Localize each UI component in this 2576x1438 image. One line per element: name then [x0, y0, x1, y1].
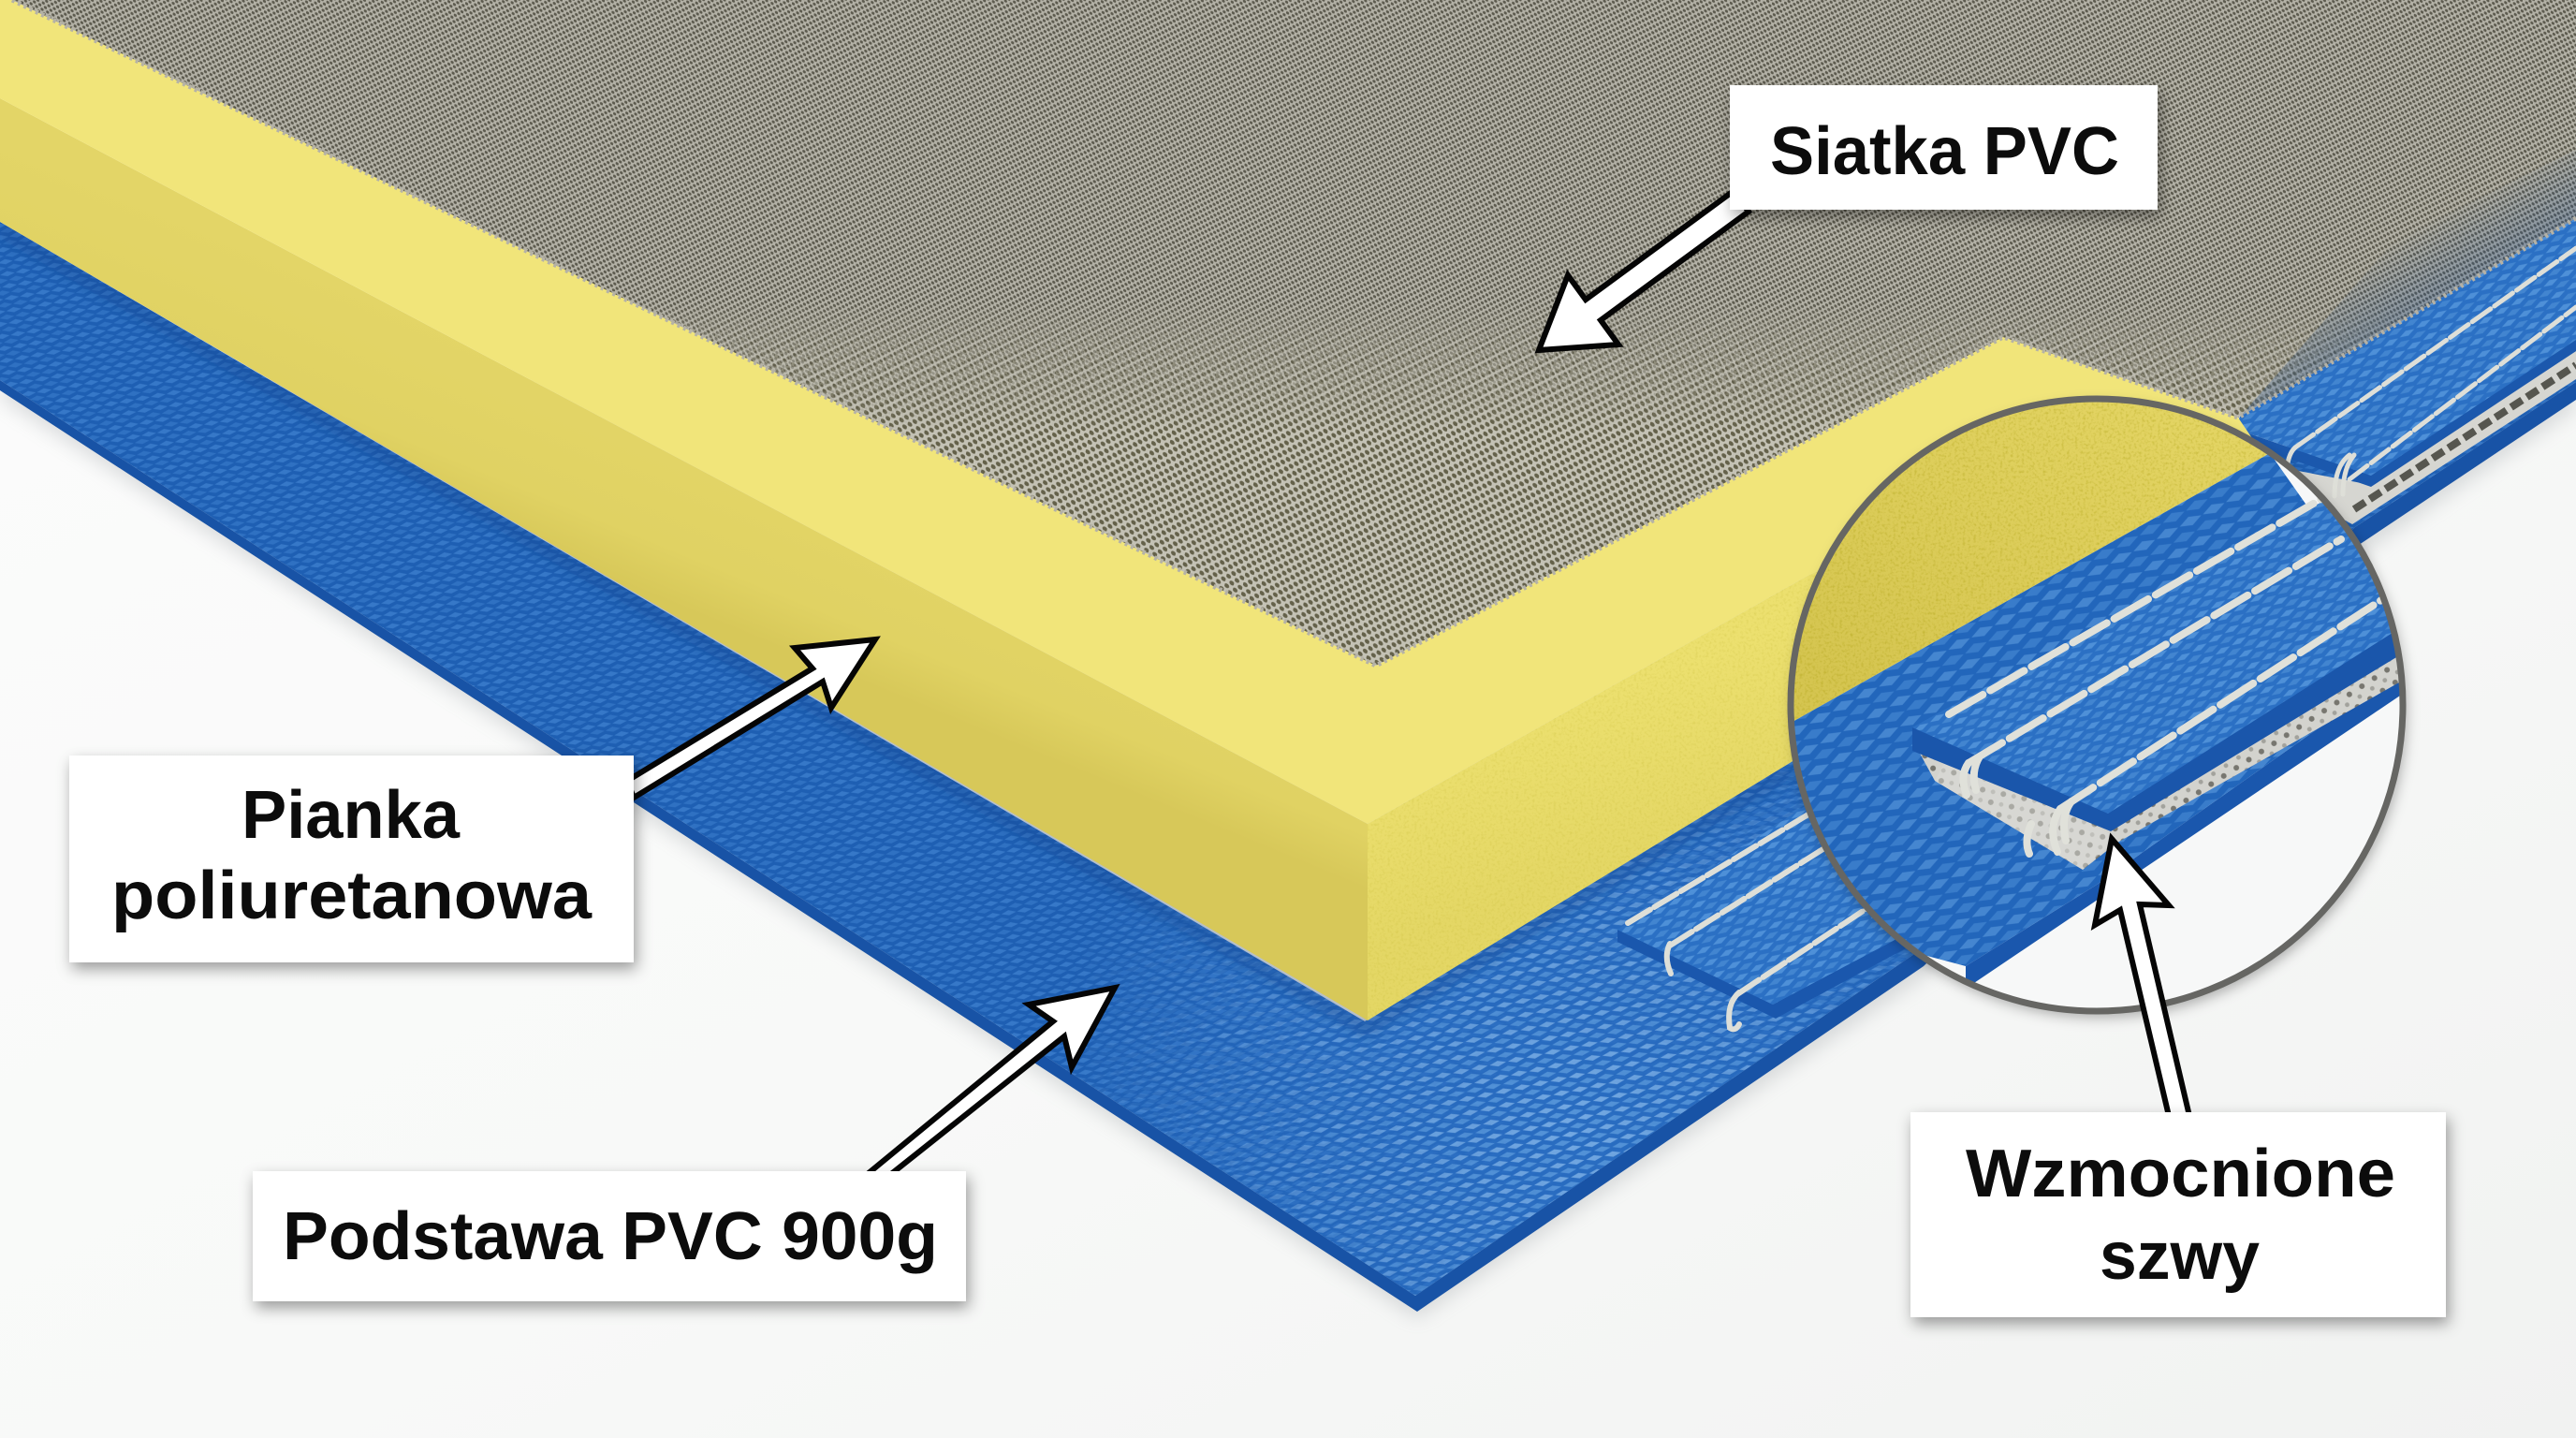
- polyurethane foam layer: [0, 0, 2266, 1020]
- label: Pianka poliuretanowa: poliuretanowa: [111, 858, 593, 933]
- arrow: mesh: [1539, 191, 1749, 350]
- strip side: [2235, 340, 2576, 487]
- frayed mesh edge: [12, 0, 2576, 666]
- foam contact shadow: [0, 229, 1790, 1029]
- stitches: [1628, 807, 1881, 1029]
- base side edge: [0, 380, 2576, 1312]
- label: Wzmocnione szwy: Wzmocnione: [1966, 1137, 2395, 1211]
- label: Pianka poliuretanowa: Pianka: [242, 778, 461, 853]
- lens strip side: [1912, 624, 2406, 831]
- strip top: [1617, 796, 1928, 1005]
- lens fabric: [1912, 646, 2406, 870]
- label: Wzmocnione szwy: [1910, 1112, 2446, 1317]
- blue PVC base layer: [0, 222, 2576, 1318]
- arrow: foam: [627, 639, 875, 798]
- foam left face: [0, 98, 1368, 1020]
- foam grain: [1368, 431, 2266, 1020]
- lens stitches: [1949, 499, 2381, 854]
- arrow: seams: [2095, 839, 2189, 1116]
- seam strip upper right: [2235, 218, 2576, 524]
- label: Wzmocnione szwy: szwy: [2100, 1219, 2260, 1294]
- strip side: [1617, 922, 1928, 1019]
- foam right face: [1368, 431, 2266, 1020]
- lens foam: [1793, 403, 2267, 721]
- magnifier lens: [1760, 374, 2434, 1025]
- strip top: [2235, 218, 2576, 476]
- label: Siatka PVC: Siatka PVC: [1770, 114, 2119, 189]
- lens base side: [1966, 667, 2406, 989]
- PVC mesh layer: [12, 0, 2576, 666]
- lens base top: [1760, 453, 2406, 966]
- foam top: [0, 0, 2266, 824]
- arrow: base: [858, 988, 1115, 1181]
- label: Podstawa PVC 900g: Podstawa PVC 900g: [283, 1199, 938, 1274]
- label: Pianka poliuretanowa: [69, 756, 634, 962]
- lens strip top: [1912, 499, 2406, 814]
- label: Siatka PVC: [1730, 85, 2158, 210]
- fabric band: [2284, 351, 2576, 524]
- seam strip lower left: [1617, 796, 1928, 1029]
- base top surface: [0, 222, 2576, 1296]
- stitches: [2287, 248, 2576, 496]
- label: Podstawa PVC 900g: [253, 1171, 966, 1301]
- lens rim: [1791, 399, 2403, 1011]
